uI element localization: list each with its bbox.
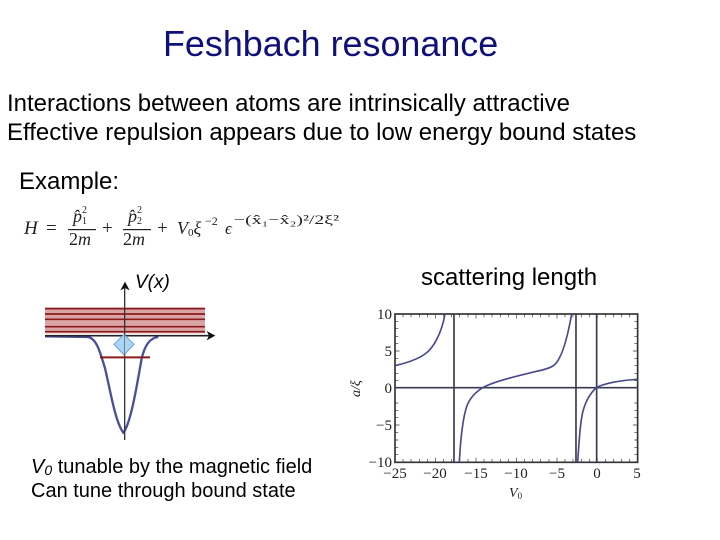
chart tick labels: 5: [633, 466, 641, 482]
icon: bound molecule diamond: [114, 334, 134, 355]
equation: Hamiltonian: ξ: [194, 218, 202, 238]
equation: Hamiltonian: 2m: [123, 229, 145, 249]
chart tick labels: 0: [593, 466, 601, 482]
chart tick labels: −5: [376, 418, 392, 434]
equation: Hamiltonian: 2: [137, 216, 142, 227]
vertical axis arrow: [120, 282, 130, 440]
equation: Hamiltonian: 1: [82, 216, 87, 227]
equation: Hamiltonian: p̂: [71, 206, 82, 226]
potential curve: [45, 336, 158, 433]
text block: intro statements: [7, 90, 636, 146]
bound state level: [100, 354, 150, 360]
chart tick labels: 10: [377, 307, 392, 323]
equation: Hamiltonian: V: [177, 218, 188, 238]
text block: tunability notes: [31, 456, 312, 502]
text block: tunability notes: Can tune through bound state: [31, 480, 296, 502]
axes and asymptotes: [395, 314, 638, 462]
diagram: potential well: [45, 282, 215, 440]
equation: Hamiltonian: 0: [188, 227, 194, 239]
equation: Hamiltonian: p̂: [126, 206, 137, 226]
equation: Hamiltonian: 2: [82, 205, 87, 216]
text block: intro statements: Effective repulsion appears due to low energy bound states: [7, 119, 636, 146]
chart: scattering length vs V0: [395, 314, 638, 462]
equation: Hamiltonian: −2: [205, 214, 218, 228]
heading: example: Example:: [19, 168, 119, 195]
x axis label: 0: [518, 491, 523, 501]
text block: tunability notes: 0: [44, 462, 52, 478]
chart tick labels: 0: [384, 381, 392, 397]
chart tick labels: −20: [423, 466, 447, 482]
text block: intro statements: Interactions between atoms are intrinsically attractive: [7, 90, 570, 117]
text block: tunability notes: V: [31, 456, 46, 478]
chart tick labels: −10: [369, 455, 392, 471]
chart tick labels: −15: [464, 466, 488, 482]
title: Feshbach resonance: [163, 24, 498, 64]
equation: Hamiltonian: −(x̂₁−x̂₂)²/2ξ²: [234, 212, 339, 227]
energy band continuum: [45, 307, 205, 333]
equation: Hamiltonian: +: [157, 218, 168, 239]
equation: Hamiltonian: ϵ: [225, 219, 233, 238]
chart tick labels: −10: [504, 466, 528, 482]
equation: Hamiltonian: [23, 205, 339, 249]
plot frame and ticks: [395, 314, 638, 462]
chart tick labels: 5: [384, 344, 392, 360]
equation: Hamiltonian: 2m: [69, 229, 91, 249]
equation: Hamiltonian: 2: [137, 205, 142, 216]
horizontal axis arrow: [45, 331, 215, 340]
equation: Hamiltonian: =: [46, 218, 57, 239]
label: V(x): V(x): [135, 272, 170, 293]
text block: tunability notes: tunable by the magnetic field: [52, 456, 312, 478]
chart heading: scattering length: scattering length: [421, 264, 597, 291]
curve branches: [395, 314, 638, 462]
equation: Hamiltonian: +: [102, 218, 113, 239]
chart tick labels: −5: [549, 466, 565, 482]
chart tick labels: [369, 307, 641, 482]
y axis label: a/ξ: [349, 380, 364, 397]
chart tick labels: −25: [383, 466, 407, 482]
x axis label: V: [509, 486, 518, 501]
equation: Hamiltonian: H: [23, 218, 39, 239]
